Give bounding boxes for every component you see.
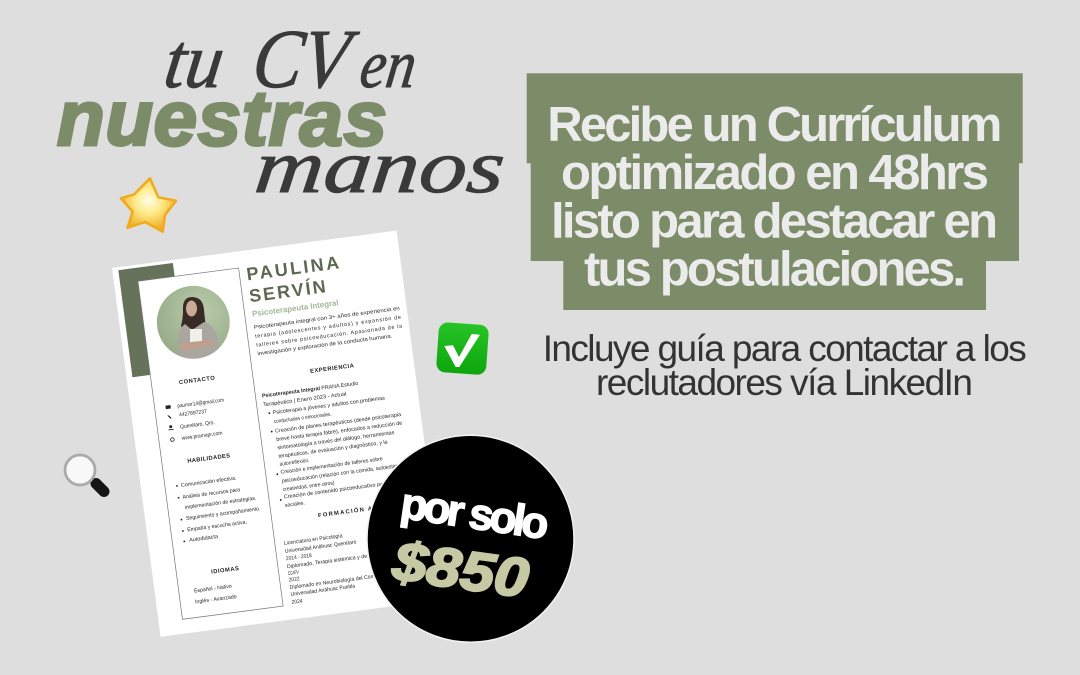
badge label: por solo: por solo — [398, 479, 552, 549]
resume experience list: Psicoterapia a jóvenes y adultos con problemas — [272, 395, 386, 416]
resume education list: Universidad Anáhuac Querétaro — [285, 539, 357, 555]
resume summary: terapia (adolescentes y adultos) y expansión de — [255, 315, 401, 340]
resume name: PAULINA — [245, 252, 340, 284]
resume heading: habilidades: HABILIDADES — [187, 453, 231, 465]
title line: tu CV en: CV — [247, 13, 363, 106]
resume education list: Diplomado en Neurobiología del Comportamiento — [289, 570, 402, 591]
resume education list: CCAPV — [288, 570, 299, 577]
resume summary — [254, 306, 404, 357]
resume skills list: Comunicación efectiva. — [181, 476, 237, 489]
headline text: Recibe un Currículum — [547, 98, 1002, 152]
resume contact list: paumvr14@gmail.com — [177, 397, 225, 410]
resume heading: experiencia: EXPERIENCIA — [310, 363, 355, 375]
resume experience list: creatividad, entre otros) — [283, 480, 335, 493]
resume education list: Licenciatura en Psicología — [284, 533, 343, 547]
resume experience list: autorreflexión. — [279, 458, 310, 468]
headline text: tus postulaciones. — [584, 243, 966, 297]
resume experience list: Creación de planes terapéuticos (desde psicoterapia — [275, 412, 402, 435]
resume experience list: conductuales o emocionales. — [274, 412, 332, 425]
panel: resume document — [112, 231, 445, 637]
resume green corner block — [118, 263, 187, 377]
resume paper — [112, 231, 445, 637]
resume name: SERVÍN — [248, 275, 327, 306]
resume contact list: Querétaro, Qro. — [180, 420, 215, 430]
subheading text: Incluye guía para contactar a los — [543, 328, 1027, 369]
resume contact list — [165, 397, 229, 443]
resume skills list — [176, 473, 264, 544]
resume education list — [284, 526, 404, 606]
resume skills list: Empatía y escucha activa. — [187, 520, 247, 533]
resume experience list — [262, 376, 411, 510]
resume experience list: Psicoterapeuta Integral PRANA Estudio — [262, 381, 359, 399]
resume summary: talleres sobre psicoeducación. Apasionada de la — [256, 324, 403, 349]
resume experience list: Creación e implementación de talleres sobre — [280, 456, 383, 476]
headline text — [547, 98, 1002, 297]
resume education list: 2022 — [288, 576, 300, 584]
resume experience list: Creación de contenido psicoeducativo para redes — [284, 479, 404, 500]
resume languages list: Inglés - Avanzado — [195, 594, 237, 605]
resume role: Psicoterapeuta Integral — [252, 298, 339, 319]
resume name — [245, 252, 343, 306]
title line: tu CV en: en — [356, 26, 422, 102]
resume photo — [157, 286, 230, 360]
resume experience list: psicoeducación (relación con la comida, autoestima, — [281, 463, 404, 485]
badge price: $850: $850 — [388, 529, 533, 609]
resume languages list: Español - Nativo — [194, 584, 232, 595]
resume education list: Universidad Anáhuac Puebla — [290, 584, 356, 598]
resume experience list: sintomatología a través del diálogo, herramientas — [277, 430, 395, 451]
resume education list: 2014 - 2018 — [286, 553, 312, 562]
resume education list: 2024 — [291, 598, 303, 606]
title: tu CV en nuestras manos — [57, 13, 509, 209]
resume education list: Diplomado, Terapia sistémica y de pareja — [287, 552, 384, 570]
subheading text — [543, 328, 1027, 403]
subheading text: reclutadores vía LinkedIn — [596, 362, 973, 403]
resume heading: formacion academica: FORMACIÓN ACADÉMICA — [318, 499, 415, 519]
resume experience list: breve hasta terapia fàbre), enfocados a reducción de — [276, 420, 403, 443]
resume summary: investigación y exploración de la conducta humana. — [257, 334, 393, 357]
resume contact list: www.pramapr.com — [180, 430, 223, 442]
headline text: listo para destacar en — [551, 194, 998, 248]
panel: headline — [527, 73, 1023, 310]
resume experience list: sociales. — [285, 500, 305, 509]
title line: tu CV en: tu — [160, 17, 230, 104]
resume skills list: Seguimiento y acompañamiento. — [186, 506, 261, 522]
icon: check mark — [436, 322, 489, 375]
resume heading: contacto: CONTACTO — [179, 375, 216, 386]
resume skills list: implementación de estrategias. — [185, 496, 257, 511]
resume skills list: Análisis de recursos para — [182, 487, 240, 501]
headline text: optimizado en 48hrs — [561, 146, 989, 200]
resume skills list: Autodidacta — [189, 534, 218, 544]
resume contact list: 4427697237 — [179, 409, 207, 418]
resume sidebar box — [138, 268, 283, 619]
icon: star — [121, 178, 176, 232]
headline background — [527, 73, 1023, 310]
badge circle — [367, 435, 574, 642]
title line: nuestras: nuestras — [57, 74, 387, 162]
resume heading: idiomas: IDIOMAS — [211, 566, 239, 576]
title line: manos: manos — [251, 125, 509, 209]
resume summary: Psicoterapeuta integral con 3+ años de experiencia en — [254, 306, 400, 331]
resume experience list: terapéuticas, de evaluación y diagnóstico, y la — [278, 440, 388, 460]
resume languages list — [193, 583, 237, 605]
icon: magnifying glass — [65, 455, 104, 492]
title line: tu CV en — [160, 13, 422, 106]
price badge — [367, 435, 574, 642]
resume experience list: Terapéutico | Enero 2023 - Actual — [263, 391, 347, 408]
